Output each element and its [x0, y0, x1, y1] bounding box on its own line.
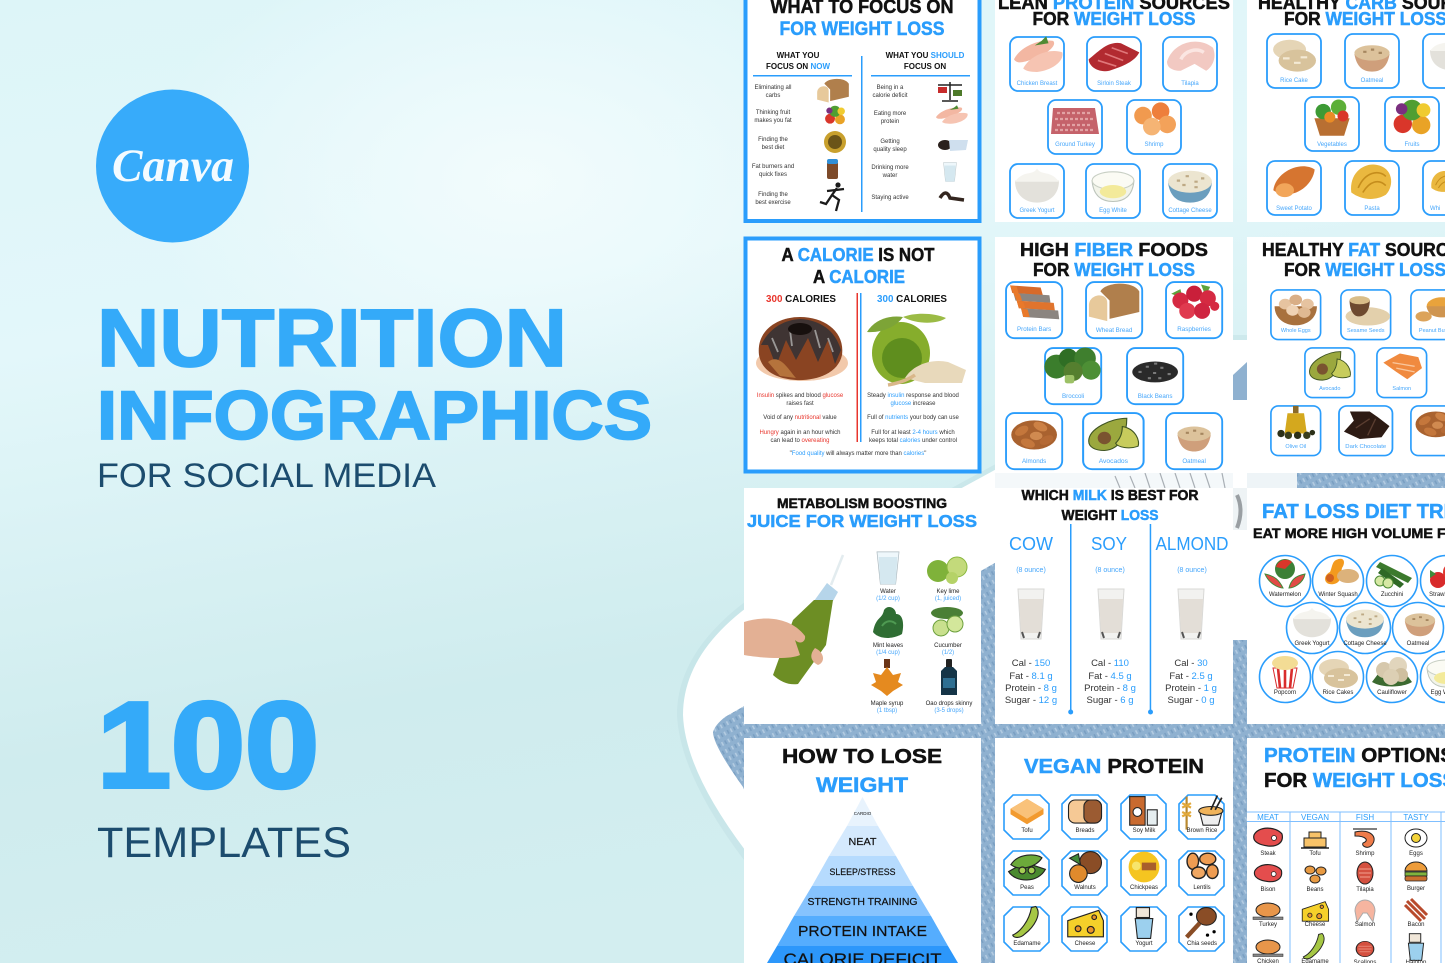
heading: what to focus on: FOR WEIGHT LOSS: [780, 19, 944, 40]
heading: vegan protein: VEGAN PROTEIN: [1024, 756, 1204, 778]
image: hand holding green juice bottle: [744, 555, 843, 684]
column: cow milk: Cal - 150: [1012, 658, 1050, 669]
tile: greek yogurt: [1010, 164, 1064, 218]
tile: sweet potato: [1267, 161, 1321, 215]
tile: greek yogurt: Greek Yogurt: [1019, 208, 1055, 214]
tile: tofu: Tofu: [1021, 828, 1033, 834]
column: almond milk: [1156, 534, 1228, 706]
column heading: should: FOCUS ON: [904, 62, 946, 71]
tile: lentils: Lentils: [1193, 885, 1211, 891]
tile: broccoli: [1044, 347, 1101, 404]
tile: dark chocolate: [1339, 406, 1392, 456]
column: soy milk: Cal - 110: [1091, 658, 1129, 669]
item: greek yogurt: [1286, 602, 1338, 654]
tile: chickpeas: [1121, 851, 1166, 895]
list: recommended focus: protein: [881, 119, 899, 125]
ingredient: key lime: Key lime: [936, 589, 960, 595]
tile: cheese: [1062, 907, 1107, 951]
list: recommended focus: water: [882, 173, 897, 179]
list: current focus: quick fixes: [759, 172, 787, 178]
logo: Canva circle: [96, 90, 249, 242]
heading: how to lose weight: HOW TO LOSE: [782, 746, 942, 768]
tile: avocado: Avocado: [1319, 386, 1340, 392]
panel: how to lose weight: [744, 738, 981, 963]
ingredient: oao drops skinny: [926, 659, 972, 714]
item: cauliflower: [1366, 652, 1418, 702]
item: winter squash: Winter Squash: [1318, 592, 1358, 598]
column: meat: Steak: [1260, 851, 1277, 857]
subtitle: FOR SOCIAL MEDIA: [97, 457, 436, 495]
heading: high fiber: [1020, 240, 1208, 280]
item: popcorn: [1260, 652, 1310, 702]
tile: almonds: Almonds: [1022, 458, 1046, 465]
tile: ground turkey: [1048, 100, 1102, 154]
item: oatmeal: Oatmeal: [1407, 641, 1429, 647]
list: recommended focus: Staying active: [871, 195, 909, 201]
list: recommended focus: quality sleep: [873, 147, 907, 153]
tile: avocados: Avocados: [1099, 458, 1128, 465]
heading: calorie: A CALORIE: [813, 267, 905, 287]
panel: a calorie is not a calorie: [746, 238, 980, 472]
chart: pyramid: STRENGTH TRAINING: [808, 897, 918, 908]
ingredient: mint leaves: (1/4 cup): [876, 650, 900, 656]
chart: pyramid: CARDIO: [854, 811, 872, 816]
tile: partial oats: [1423, 34, 1445, 88]
tile: fruits: [1385, 97, 1439, 151]
column heading: now: WHAT YOU: [777, 51, 820, 60]
column: meat: Turkey: [1259, 922, 1277, 928]
tile: fruits: Fruits: [1404, 142, 1420, 148]
heading: healthy fat: [1262, 240, 1445, 280]
heading: how to lose weight: [782, 746, 942, 797]
column: tasty: Burger: [1407, 886, 1425, 892]
tile: cheese: Cheese: [1075, 941, 1096, 947]
table header: TASTY: [1403, 813, 1429, 822]
column: almond milk: Protein - 1 g: [1165, 683, 1217, 694]
text: cake effects: Hungry again in an hour which: [759, 430, 841, 436]
tile: chicken breast: Chicken Breast: [1017, 81, 1058, 87]
text: cake effects: Void of any nutritional value: [763, 415, 837, 421]
text: apple effects: Steady insulin response and blood: [867, 393, 959, 399]
panel: lean protein sources: [995, 0, 1233, 222]
column: tasty: Bacon: [1407, 922, 1425, 928]
tile: salmon: Salmon: [1392, 386, 1411, 392]
heading: protein options: [1264, 745, 1445, 792]
panel: healthy carb sources: [1247, 0, 1445, 222]
list: current focus: carbs: [766, 93, 780, 99]
column: almond milk: Sugar - 0 g: [1167, 695, 1215, 706]
heading: juice: METABOLISM BOOSTING: [777, 495, 947, 511]
panel: what to focus on: [746, 0, 980, 221]
tile: yogurt: Yogurt: [1135, 941, 1153, 947]
text: cake effects: [757, 393, 844, 444]
tile: walnuts: Walnuts: [1074, 885, 1096, 891]
tile: brown rice: [1179, 795, 1224, 839]
heading: juice: [747, 495, 977, 531]
tile: soy milk: Soy Milk: [1133, 828, 1156, 834]
text: apple effects: keeps total calories under control: [869, 438, 957, 444]
column: cow milk: Protein - 8 g: [1005, 683, 1057, 694]
tile: egg white: Egg White: [1099, 208, 1127, 214]
tile: pasta: [1345, 161, 1399, 215]
column: meat: [1253, 828, 1283, 963]
column: meat: Bison: [1260, 887, 1276, 893]
ingredient: maple syrup: (1 tbsp): [877, 708, 897, 714]
tile: edamame: [1004, 906, 1049, 951]
chart: pyramid: SLEEP/STRESS: [830, 867, 896, 878]
tile: chicken breast: [1010, 36, 1064, 91]
title: nutrition infographics: NUTRITION: [97, 293, 567, 384]
list: current focus: [752, 79, 849, 211]
column heading: 300 calories red: 300 CALORIES: [766, 294, 836, 305]
chart: pyramid: PROTEIN INTAKE: [798, 923, 927, 940]
column: soy milk: Sugar - 6 g: [1086, 695, 1134, 706]
column: vegan: Beans: [1306, 887, 1324, 893]
heading: lean protein: FOR WEIGHT LOSS: [1032, 9, 1196, 29]
heading: calorie: [782, 245, 934, 287]
column: fish: Salmon: [1355, 922, 1375, 928]
ingredient: maple syrup: Maple syrup: [871, 701, 904, 707]
tile: whole grain: [1423, 161, 1445, 215]
callout: food quality: "Food quality will always matter more than calories": [790, 451, 926, 457]
ingredient: water: Water: [880, 589, 896, 595]
list: recommended focus: [871, 82, 968, 201]
column: almond milk: (8 ounce): [1177, 567, 1207, 574]
list: current focus: Finding the: [758, 192, 789, 198]
tile: peas: [1004, 851, 1049, 895]
panel: high fiber foods: [995, 237, 1233, 473]
item: egg whites: [1420, 652, 1445, 702]
title: nutrition infographics: [97, 293, 652, 454]
item: cottage cheese: Cottage Cheese: [1343, 641, 1387, 647]
text: cake effects: can lead to overeating: [770, 438, 830, 444]
tile: chickpeas: Chickpeas: [1130, 885, 1158, 891]
tile: egg white: [1086, 164, 1140, 218]
column: fish: [1353, 829, 1377, 963]
tile: salmon: [1377, 348, 1427, 398]
table header: [1247, 812, 1445, 963]
list: current focus: best diet: [762, 145, 785, 151]
panel: fat loss diet tricks: [1247, 488, 1445, 724]
list: recommended focus: Getting: [880, 139, 900, 145]
list: current focus: Fat burners and: [752, 164, 794, 170]
item: winter squash: [1312, 556, 1364, 606]
column: soy milk: Fat - 4.5 g: [1088, 671, 1132, 682]
heading: calorie: A CALORIE IS NOT: [782, 245, 934, 265]
chart: pyramid: [767, 797, 958, 963]
tile: sweet potato: Sweet Potato: [1276, 206, 1313, 212]
ingredient: mint leaves: Mint leaves: [873, 643, 903, 649]
tile: soy milk: [1121, 795, 1166, 839]
ingredient: cucumber: Cucumber: [934, 643, 962, 649]
chart: pyramid: NEAT: [848, 836, 877, 848]
tile: walnuts: [1062, 851, 1107, 895]
tile: chia seeds: [1179, 907, 1224, 951]
item: popcorn: Popcorn: [1274, 690, 1296, 696]
tile: pasta: Pasta: [1364, 206, 1380, 212]
tile: peanut butter: [1411, 290, 1445, 340]
tile: vegetables: Vegetables: [1317, 142, 1347, 148]
column: cow milk: [1005, 534, 1057, 706]
ingredient: key lime: [927, 557, 967, 602]
ingredient: oao drops skinny: (3-5 drops): [934, 708, 964, 714]
ingredient: mint leaves: [873, 607, 903, 656]
column: soy milk: Protein - 8 g: [1084, 683, 1136, 694]
tile: tilapia: [1163, 37, 1217, 91]
tile: protein bars: Protein Bars: [1017, 326, 1051, 333]
item: greek yogurt: Greek Yogurt: [1294, 641, 1330, 647]
logo: Canva circle: Canva: [112, 140, 234, 192]
column heading: 300 calories blue: 300 CALORIES: [877, 294, 947, 305]
tile: raspberries: Raspberries: [1177, 326, 1211, 333]
tile: shrimp: [1127, 100, 1181, 154]
tile: sirloin steak: Sirloin Steak: [1097, 81, 1132, 87]
item: strawberries: [1420, 556, 1445, 606]
tile: broccoli: Broccoli: [1062, 393, 1084, 400]
column: vegan: [1301, 832, 1329, 963]
column: soy milk: [1084, 534, 1136, 706]
panel: which milk is best: [995, 488, 1233, 724]
list: current focus: Eliminating all: [754, 85, 792, 91]
tile: wheat bread: Wheat Bread: [1096, 327, 1133, 334]
image: chocolate bundt cake: [756, 317, 848, 381]
column: vegan: Cheese: [1305, 922, 1326, 928]
decorative white plate behind the cards: [677, 335, 1445, 963]
panel: healthy fat sources: [1247, 237, 1445, 473]
column heading: now: FOCUS ON NOW: [766, 62, 830, 71]
heading: what to focus on: [770, 0, 954, 40]
tile: tofu: [1004, 795, 1049, 839]
tile: ground turkey: Ground Turkey: [1055, 142, 1095, 148]
column: fish: Shrimp: [1355, 851, 1375, 857]
ingredient: oao drops skinny: Oao drops skinny: [926, 701, 972, 707]
column: almond milk: Cal - 30: [1174, 658, 1208, 669]
heading: milk: [1022, 488, 1199, 524]
big number: 100: 100: [97, 677, 319, 813]
tile: peas: Peas: [1020, 885, 1034, 891]
panel: metabolism boosting juice: [744, 488, 981, 724]
item: rice cakes: [1312, 652, 1364, 702]
tile: shrimp: Shrimp: [1144, 142, 1164, 148]
column: almond milk: ALMOND: [1156, 534, 1228, 554]
tile: whole eggs: Whole Eggs: [1281, 328, 1311, 334]
column: cow milk: Sugar - 12 g: [1005, 695, 1057, 706]
column heading: should: WHAT YOU SHOULD: [886, 51, 965, 60]
ingredient: cucumber: [931, 607, 963, 656]
panel: vegan protein: [995, 738, 1233, 963]
text: apple effects: Full of nutrients your body can use: [867, 415, 960, 421]
tile: avocado: [1305, 348, 1355, 398]
tile: protein bars: [1006, 282, 1062, 338]
tile: sesame seeds: Sesame Seeds: [1347, 328, 1385, 334]
ingredient: water: (1/2 cup): [876, 596, 900, 602]
tile: olive oil: [1271, 406, 1321, 456]
item: watermelon: Watermelon: [1269, 592, 1301, 598]
tile: raspberries: [1166, 282, 1222, 338]
list: current focus: Finding the: [758, 137, 789, 143]
list: current focus: makes you fat: [754, 118, 792, 124]
column: vegan: Tofu: [1309, 851, 1321, 857]
column: tasty: Eggs: [1409, 851, 1423, 857]
column: cow milk: (8 ounce): [1016, 567, 1046, 574]
heading: lean protein: [998, 0, 1230, 29]
heading: milk: WHICH MILK IS BEST FOR: [1022, 488, 1199, 504]
table header: FISH: [1356, 813, 1374, 822]
tile: oatmeal: [1166, 413, 1222, 469]
text: apple effects: glucose increase: [890, 401, 936, 407]
column: almond milk: Fat - 2.5 g: [1169, 671, 1213, 682]
tile: oatmeal: [1345, 34, 1399, 88]
tile: whole eggs: [1271, 290, 1321, 340]
ingredient: key lime: (1, juiced): [935, 596, 961, 602]
heading: milk: WEIGHT LOSS: [1062, 508, 1159, 524]
tile: vegetables: [1305, 97, 1359, 151]
heading: high fiber: HIGH FIBER FOODS: [1020, 240, 1208, 260]
tile: tilapia: Tilapia: [1181, 81, 1199, 87]
tile: rice cake: Rice Cake: [1280, 78, 1308, 84]
heading: healthy carb: [1258, 0, 1445, 29]
tile: black beans: Black Beans: [1138, 393, 1172, 400]
label: templates: TEMPLATES: [97, 819, 351, 867]
tile: sesame seeds: [1341, 290, 1391, 340]
tile: avocados: [1083, 413, 1144, 469]
column: cow milk: COW: [1009, 534, 1053, 554]
tile: sirloin steak: [1087, 37, 1141, 91]
column: soy milk: SOY: [1091, 534, 1127, 554]
item: cauliflower: Cauliflower: [1377, 690, 1407, 696]
list: recommended focus: Being in a: [877, 85, 904, 91]
panel: protein options: [1247, 738, 1445, 963]
heading: fat loss: [1253, 501, 1445, 541]
tile: cottage cheese: Cottage Cheese: [1168, 208, 1212, 214]
list: recommended focus: Eating more: [874, 111, 907, 117]
column heading: now: [753, 51, 852, 76]
tile: almonds: [1006, 413, 1062, 469]
title: nutrition infographics: INFOGRAPHICS: [97, 377, 652, 454]
list: current focus: Thinking fruit: [756, 110, 791, 116]
item: watermelon: [1260, 556, 1310, 606]
item: rice cakes: Rice Cakes: [1323, 690, 1353, 696]
item: oatmeal: [1392, 602, 1444, 654]
tile: rice cake: [1267, 34, 1321, 88]
heading: juice: JUICE FOR WEIGHT LOSS: [747, 511, 977, 531]
tile: oatmeal: Oatmeal: [1361, 78, 1383, 84]
text: cake effects: Insulin spikes and blood glucose: [757, 393, 844, 399]
tile: breads: Breads: [1075, 828, 1095, 834]
tile: chia seeds: Chia seeds: [1187, 941, 1217, 947]
tile: black beans: [1127, 348, 1183, 404]
tile: brown rice: Brown Rice: [1187, 828, 1218, 834]
text: cake effects: raises fast: [786, 401, 814, 407]
tile: cottage cheese: [1163, 164, 1217, 218]
list: current focus: best exercise: [755, 200, 791, 206]
tile: yogurt: [1121, 907, 1166, 951]
tile: dark chocolate: Dark Chocolate: [1345, 444, 1386, 450]
tile: wheat bread: [1086, 282, 1142, 338]
column: cow milk: Fat - 8.1 g: [1009, 671, 1053, 682]
tile: almonds: [1411, 406, 1445, 456]
text: apple effects: Full for at least 2-4 hours which: [871, 430, 955, 436]
tile: breads: [1062, 795, 1107, 839]
table header: VEGAN: [1301, 813, 1329, 822]
item: zucchini: Zucchini: [1381, 592, 1403, 598]
heading: how to lose weight: WEIGHT: [816, 774, 908, 797]
image: green apple with almonds: [867, 314, 966, 385]
tile: whole grain: Whi: [1430, 206, 1440, 212]
column: soy milk: (8 ounce): [1095, 567, 1125, 574]
list: recommended focus: Drinking more: [871, 165, 909, 171]
item: cottage cheese: [1340, 602, 1390, 654]
heading: high fiber: FOR WEIGHT LOSS: [1033, 260, 1195, 280]
ingredient: water: [876, 552, 900, 602]
item: zucchini: [1366, 556, 1418, 606]
tile: oatmeal: Oatmeal: [1182, 458, 1206, 465]
table header: MEAT: [1257, 813, 1279, 822]
column heading: should: [871, 51, 970, 76]
tile: olive oil: Olive Oil: [1285, 444, 1306, 450]
ingredient: maple syrup: [871, 659, 904, 714]
tile: edamame: Edamame: [1013, 941, 1041, 947]
column: tasty: [1405, 829, 1427, 963]
column: fish: Tilapia: [1356, 887, 1374, 893]
text: apple effects: [867, 393, 960, 444]
tile: lentils: [1179, 851, 1224, 895]
ingredient: cucumber: (1/2): [942, 650, 954, 656]
list: recommended focus: calorie deficit: [872, 93, 908, 99]
